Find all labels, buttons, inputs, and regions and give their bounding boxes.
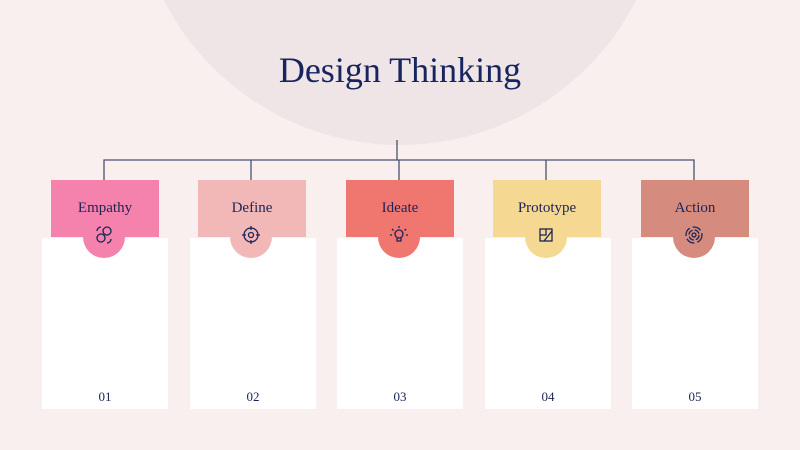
step 3 card: Ideate: 03 [394,389,406,404]
step 5 card: Action: 05 [688,389,702,404]
icon: empathy [83,216,125,258]
icon: bulb [378,216,420,258]
header: Empathy: Empathy [78,200,132,216]
step 4 card: Prototype: Prototype [518,200,576,216]
card body 1 [42,238,168,409]
icon: target [230,216,272,258]
icon: prototype [525,216,567,258]
title: Design Thinking [279,50,521,90]
header: Empathy [51,180,159,237]
step 2 card: Define: Define [232,200,272,216]
step 4 card: Prototype: 04 [542,389,554,404]
icon: action [673,216,715,258]
step 2 card: Define: 02 [246,389,260,404]
step 3 card: Ideate: Ideate [382,200,418,216]
step 5 card: Action: Action [675,200,715,216]
card body 1: 01 [98,389,112,404]
background circle [135,0,665,145]
